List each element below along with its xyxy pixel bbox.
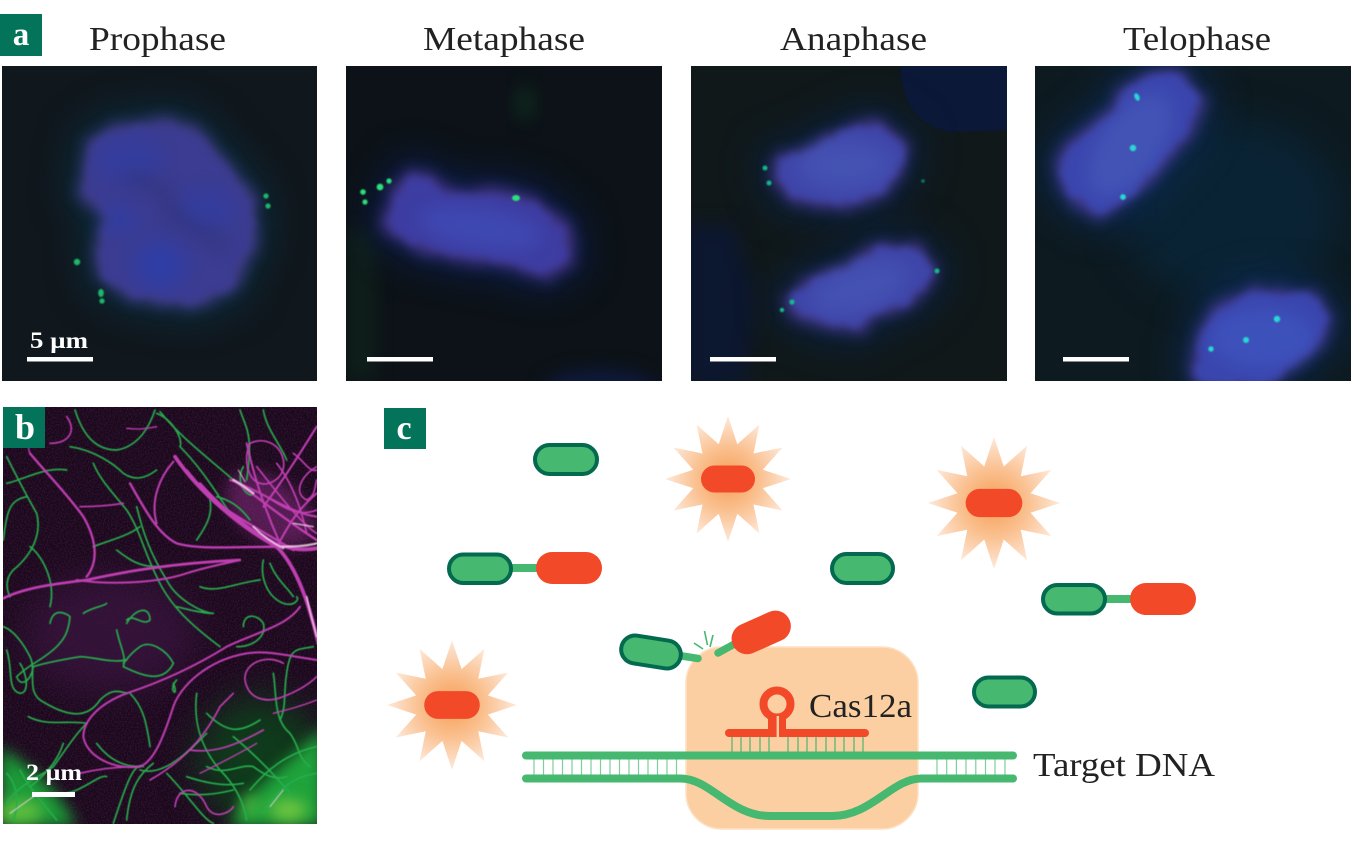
intact reporter right	[1043, 583, 1196, 615]
scale bar 2 µm	[26, 760, 82, 797]
micrograph: prophase	[2, 66, 317, 381]
panel label c: c	[396, 410, 412, 447]
panel b: filament micrograph	[0, 407, 328, 827]
panel label b: b	[15, 407, 35, 447]
Cas12a protein	[686, 647, 918, 829]
scale bar 5 µm: 5 µm	[30, 328, 88, 353]
scale bar 5 µm	[27, 328, 93, 362]
micrograph: telophase	[1035, 66, 1351, 385]
label: Cas12a: Cas12a	[809, 688, 912, 725]
panel label b	[3, 407, 45, 448]
scale bar telophase	[1063, 357, 1129, 362]
scale bar metaphase	[367, 357, 433, 362]
panel label a	[0, 14, 42, 56]
heading: Telophase: Telophase	[1123, 21, 1271, 58]
fluorescent burst top right	[928, 437, 1060, 569]
panel label c	[384, 408, 426, 449]
free green reporter 2	[832, 554, 893, 583]
micrograph: green and magenta filaments	[0, 407, 328, 827]
heading: Anaphase: Anaphase	[780, 21, 927, 58]
heading: Prophase: Prophase	[89, 21, 226, 58]
panel label a: a	[13, 17, 29, 53]
panel c: Cas12a reporter diagram	[384, 408, 1215, 829]
free green reporter 1	[535, 445, 597, 474]
free green reporter 3	[974, 678, 1035, 706]
scale bar 2 µm: 2 µm	[26, 760, 82, 785]
guide RNA	[725, 690, 869, 752]
micrograph: anaphase	[685, 60, 1010, 385]
label: Target DNA: Target DNA	[1033, 747, 1215, 784]
heading: Metaphase: Metaphase	[423, 21, 585, 58]
intact reporter left	[449, 552, 602, 584]
fluorescent burst lower left	[387, 640, 517, 770]
scale bar anaphase	[710, 357, 776, 362]
fluorescent burst top centre	[665, 416, 791, 542]
micrograph: metaphase	[346, 66, 662, 406]
uncut DNA and cleaved strand	[526, 756, 1013, 816]
panel a: mitosis micrographs	[0, 14, 1351, 406]
cleaved reporter with spark	[619, 606, 796, 671]
